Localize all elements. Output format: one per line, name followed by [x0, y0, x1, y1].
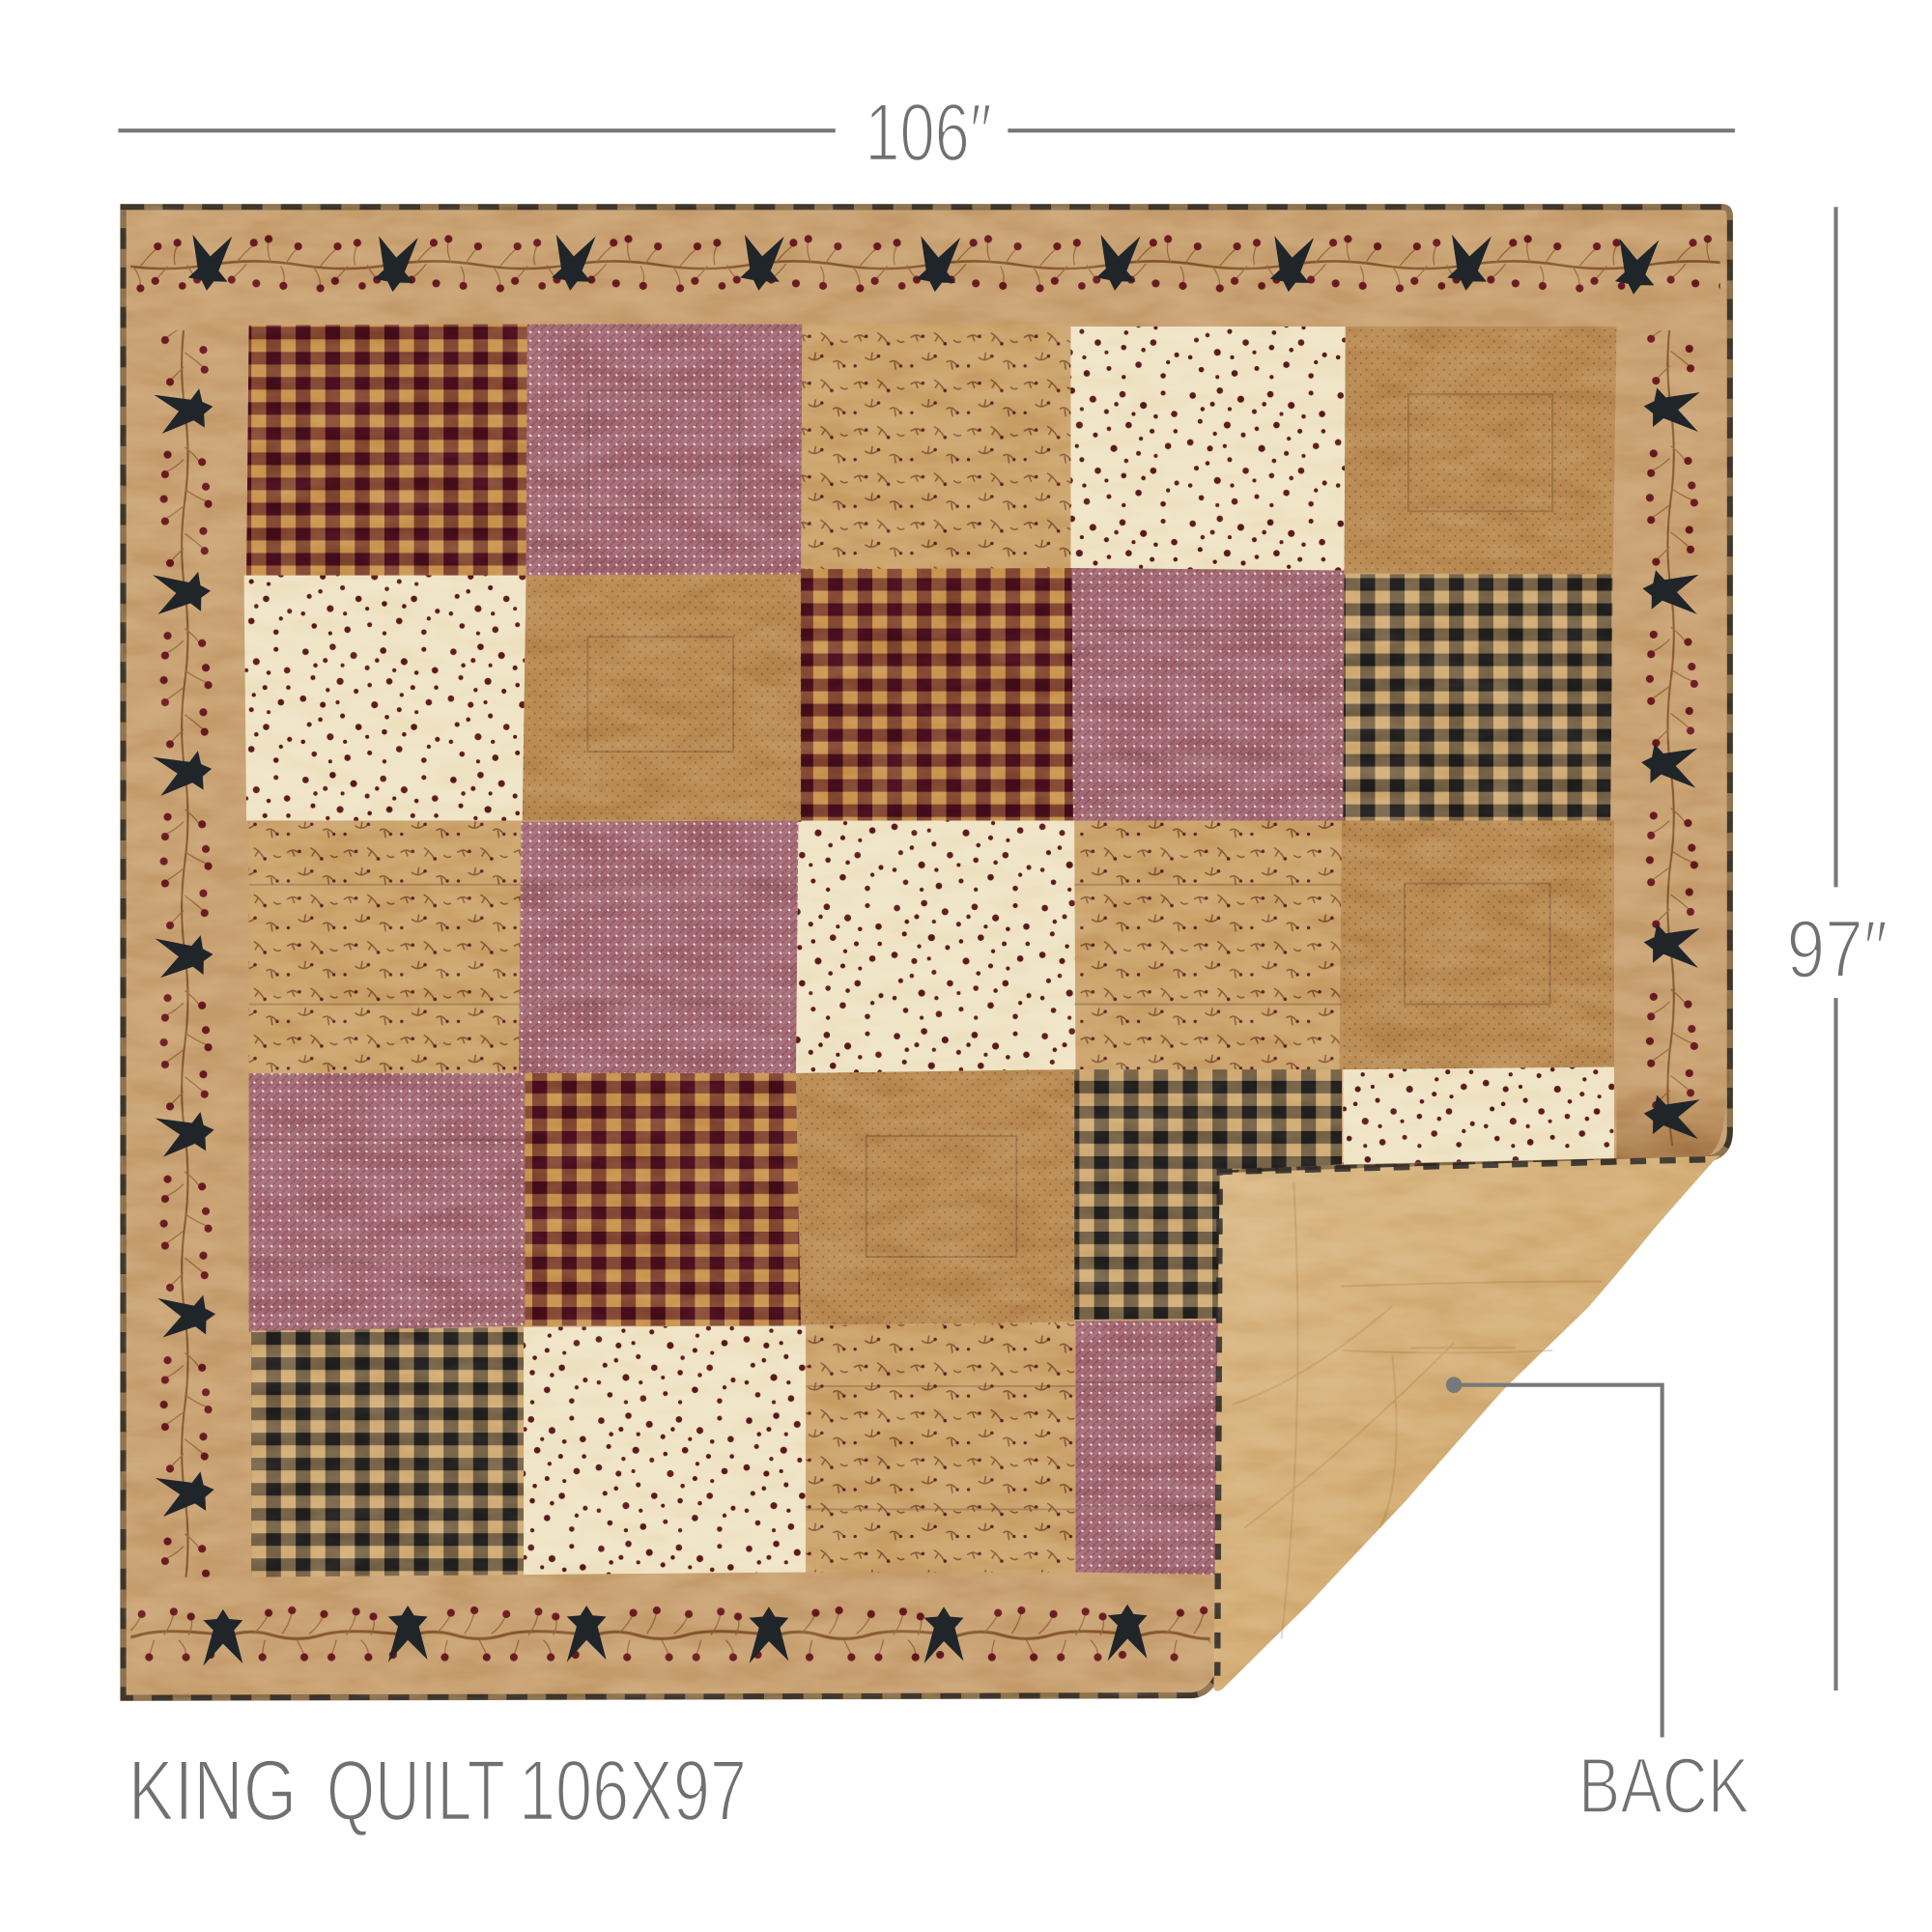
- patchwork row 3: [249, 820, 1614, 1073]
- left border stars: [153, 387, 217, 1517]
- quilt border fabric: [124, 207, 1730, 1698]
- quilting stitch lines: [249, 390, 1552, 1510]
- patchwork row 5: [251, 1321, 1220, 1577]
- product title: [128, 1742, 747, 1838]
- width dimension line: [118, 129, 1735, 132]
- back fabric wrinkles: [1233, 1182, 1602, 1638]
- height dimension line: [1834, 207, 1837, 1690]
- left vine border: [142, 330, 228, 1577]
- binding: [124, 207, 1730, 1698]
- patchwork row 4: [249, 1067, 1614, 1332]
- right border stars: [1639, 386, 1702, 1139]
- top border stars: [187, 232, 1659, 297]
- right vine border: [1628, 330, 1714, 1146]
- folded back corner: [1213, 1155, 1720, 1691]
- bottom vine border: [130, 1593, 1210, 1680]
- product title: QUILT: [327, 1742, 505, 1838]
- product title: KING: [128, 1742, 297, 1838]
- height label: 97″: [1786, 903, 1888, 994]
- bottom border stars: [203, 1605, 1148, 1665]
- top vine border: [130, 222, 1720, 308]
- product title: 106X97: [519, 1742, 747, 1838]
- fabric wrinkle shading: [118, 202, 1735, 1703]
- back callout: [1446, 1377, 1662, 1737]
- patchwork row 1: [246, 324, 1616, 576]
- quilt: [118, 202, 1735, 1703]
- width label: 106″: [865, 87, 992, 178]
- patchwork row 2: [244, 568, 1613, 820]
- back edge binding: [1217, 1159, 1705, 1676]
- back label: BACK: [1578, 1742, 1749, 1830]
- shaded lower right border corner: [1616, 1084, 1726, 1161]
